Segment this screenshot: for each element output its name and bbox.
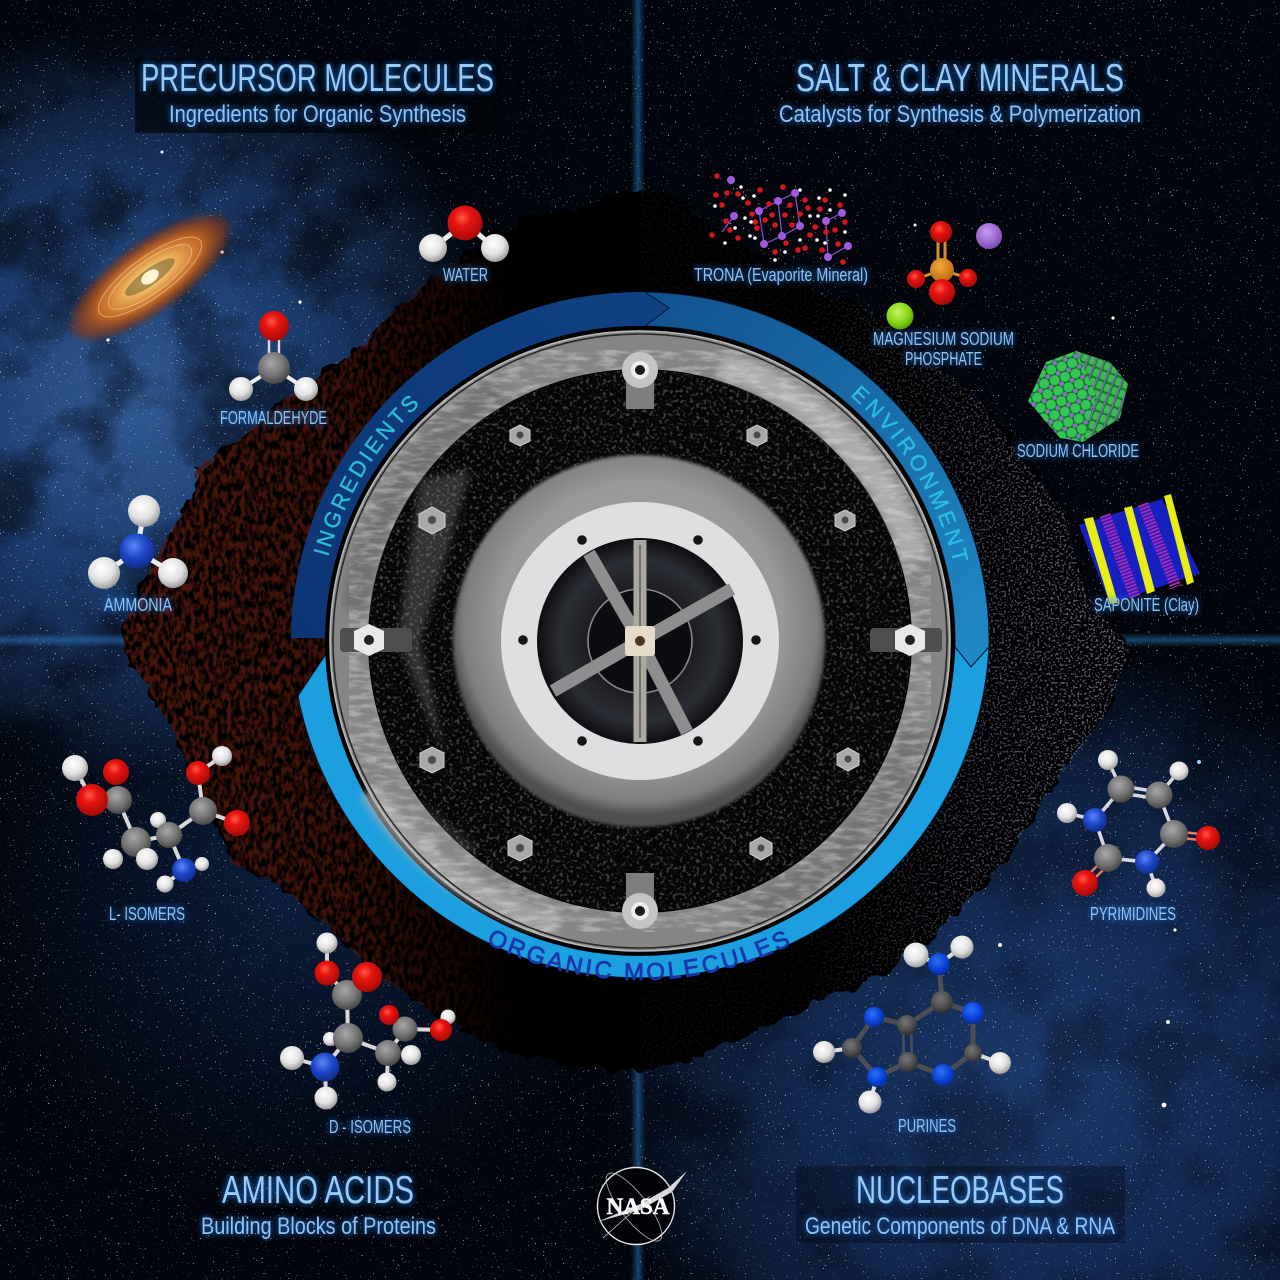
ring segment: ingredients	[291, 292, 669, 638]
title: amino acids: AMINO ACIDS	[222, 1169, 414, 1212]
molecule: ammonia: AMMONIA	[104, 595, 172, 615]
white ring holes	[518, 535, 761, 746]
fastener: left	[340, 624, 412, 656]
NASA logo: NASA	[606, 1194, 670, 1219]
molecule: formaldehyde: FORMALDEHYDE	[220, 408, 327, 428]
mineral: trona: TRONA (Evaporite Mineral)	[694, 265, 868, 285]
molecule: D-isomers: D - ISOMERS	[329, 1117, 411, 1137]
ring label: ingredients: INGREDIENTS	[314, 396, 418, 556]
title: nucleobases: Genetic Components of DNA & RNA	[805, 1213, 1115, 1240]
molecule: pyrimidines	[1057, 750, 1220, 924]
accretion disk galaxy	[48, 189, 252, 365]
molecule: formaldehyde	[220, 311, 327, 428]
mineral: saponite clay: SAPONITE (Clay)	[1094, 595, 1199, 615]
molecule: purines	[813, 936, 1011, 1136]
title: precursor molecules: Ingredients for Organic Synthesis	[169, 101, 466, 128]
title: nucleobases: NUCLEOBASES	[856, 1169, 1064, 1212]
title: precursor molecules: PRECURSOR MOLECULES	[141, 57, 494, 100]
hex nuts	[419, 425, 859, 861]
regolith sample bed	[369, 370, 911, 912]
asteroid Bennu silhouette	[123, 190, 1130, 1075]
title: amino acids: Building Blocks of Proteins	[201, 1213, 436, 1240]
molecule: L-isomers	[62, 746, 250, 924]
title: amino acids	[201, 1169, 436, 1240]
molecule: L-isomers: L- ISOMERS	[109, 904, 185, 924]
mineral: trona	[694, 176, 868, 285]
white ring	[501, 502, 779, 780]
NASA logo	[597, 1166, 687, 1248]
fastener: bottom	[622, 873, 658, 929]
ring segment: organic molecules	[298, 647, 989, 978]
molecule: water	[419, 206, 509, 285]
fastener: right	[870, 624, 942, 656]
ring label: organic molecules: ORGANIC MOLECULES	[489, 930, 790, 980]
sample container disk	[325, 326, 955, 956]
title: nucleobases	[796, 1166, 1125, 1243]
title: salt and clay minerals	[779, 57, 1141, 128]
title: precursor molecules	[135, 57, 503, 133]
mineral: magnesium sodium phosphate	[873, 221, 1014, 369]
mineral: magnesium sodium phosphate: PHOSPHATE	[905, 349, 982, 369]
molecule: ammonia	[88, 495, 188, 615]
molecule: purines: PURINES	[898, 1116, 956, 1136]
molecule: D-isomers	[280, 932, 456, 1137]
mineral: sodium chloride	[1017, 351, 1139, 461]
ring segment: environment	[645, 292, 989, 667]
metal rim	[330, 331, 950, 951]
mineral: magnesium sodium phosphate: MAGNESIUM SODIUM	[873, 329, 1014, 349]
molecule: water: WATER	[443, 265, 488, 285]
molecule: pyrimidines: PYRIMIDINES	[1090, 904, 1176, 924]
fastener: top	[622, 352, 658, 409]
gray collar	[453, 455, 825, 827]
title: salt and clay minerals: SALT & CLAY MINERALS	[796, 57, 1124, 100]
turbine hub	[537, 538, 743, 744]
mineral: saponite clay	[1079, 494, 1200, 615]
mineral: sodium chloride: SODIUM CHLORIDE	[1017, 441, 1139, 461]
title: salt and clay minerals: Catalysts for Synthesis & Polymerization	[779, 101, 1141, 128]
ring label: environment: ENVIRONMENT	[851, 385, 968, 560]
